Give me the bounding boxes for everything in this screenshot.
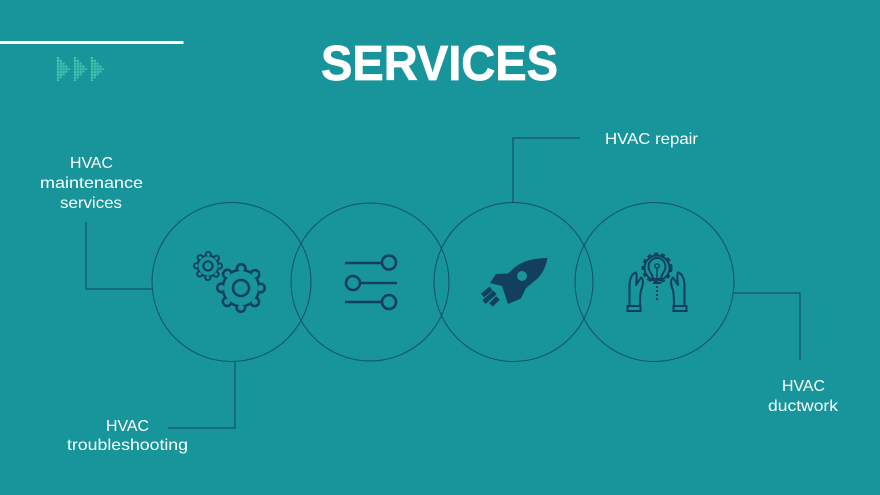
icon: gears xyxy=(196,254,260,308)
icon: lightbulb gear and hands xyxy=(628,254,686,311)
label: HVAC troubleshooting: troubleshooting xyxy=(67,437,188,454)
icon: dotted triple arrows xyxy=(58,57,103,81)
accent line xyxy=(0,41,184,44)
label: HVAC maintenance services xyxy=(40,155,143,212)
label: HVAC troubleshooting: HVAC xyxy=(106,418,149,435)
label: HVAC troubleshooting xyxy=(67,418,188,454)
overlapping circles xyxy=(152,202,734,362)
connector: troubleshooting xyxy=(168,362,235,428)
icon: rocket xyxy=(482,258,548,305)
label: HVAC repair: HVAC repair xyxy=(605,131,699,148)
connector: repair xyxy=(513,138,580,202)
label: HVAC maintenance services: HVAC xyxy=(70,155,113,172)
title: SERVICES xyxy=(321,37,558,91)
label: HVAC maintenance services: services xyxy=(60,195,122,212)
icon: sliders xyxy=(345,256,397,309)
connector: maintenance xyxy=(86,222,152,289)
label: HVAC ductwork xyxy=(768,378,839,415)
label: HVAC maintenance services: maintenance xyxy=(40,175,143,192)
label: HVAC ductwork: HVAC xyxy=(782,378,825,395)
connector: ductwork xyxy=(734,293,800,360)
label: HVAC ductwork: ductwork xyxy=(768,398,839,415)
